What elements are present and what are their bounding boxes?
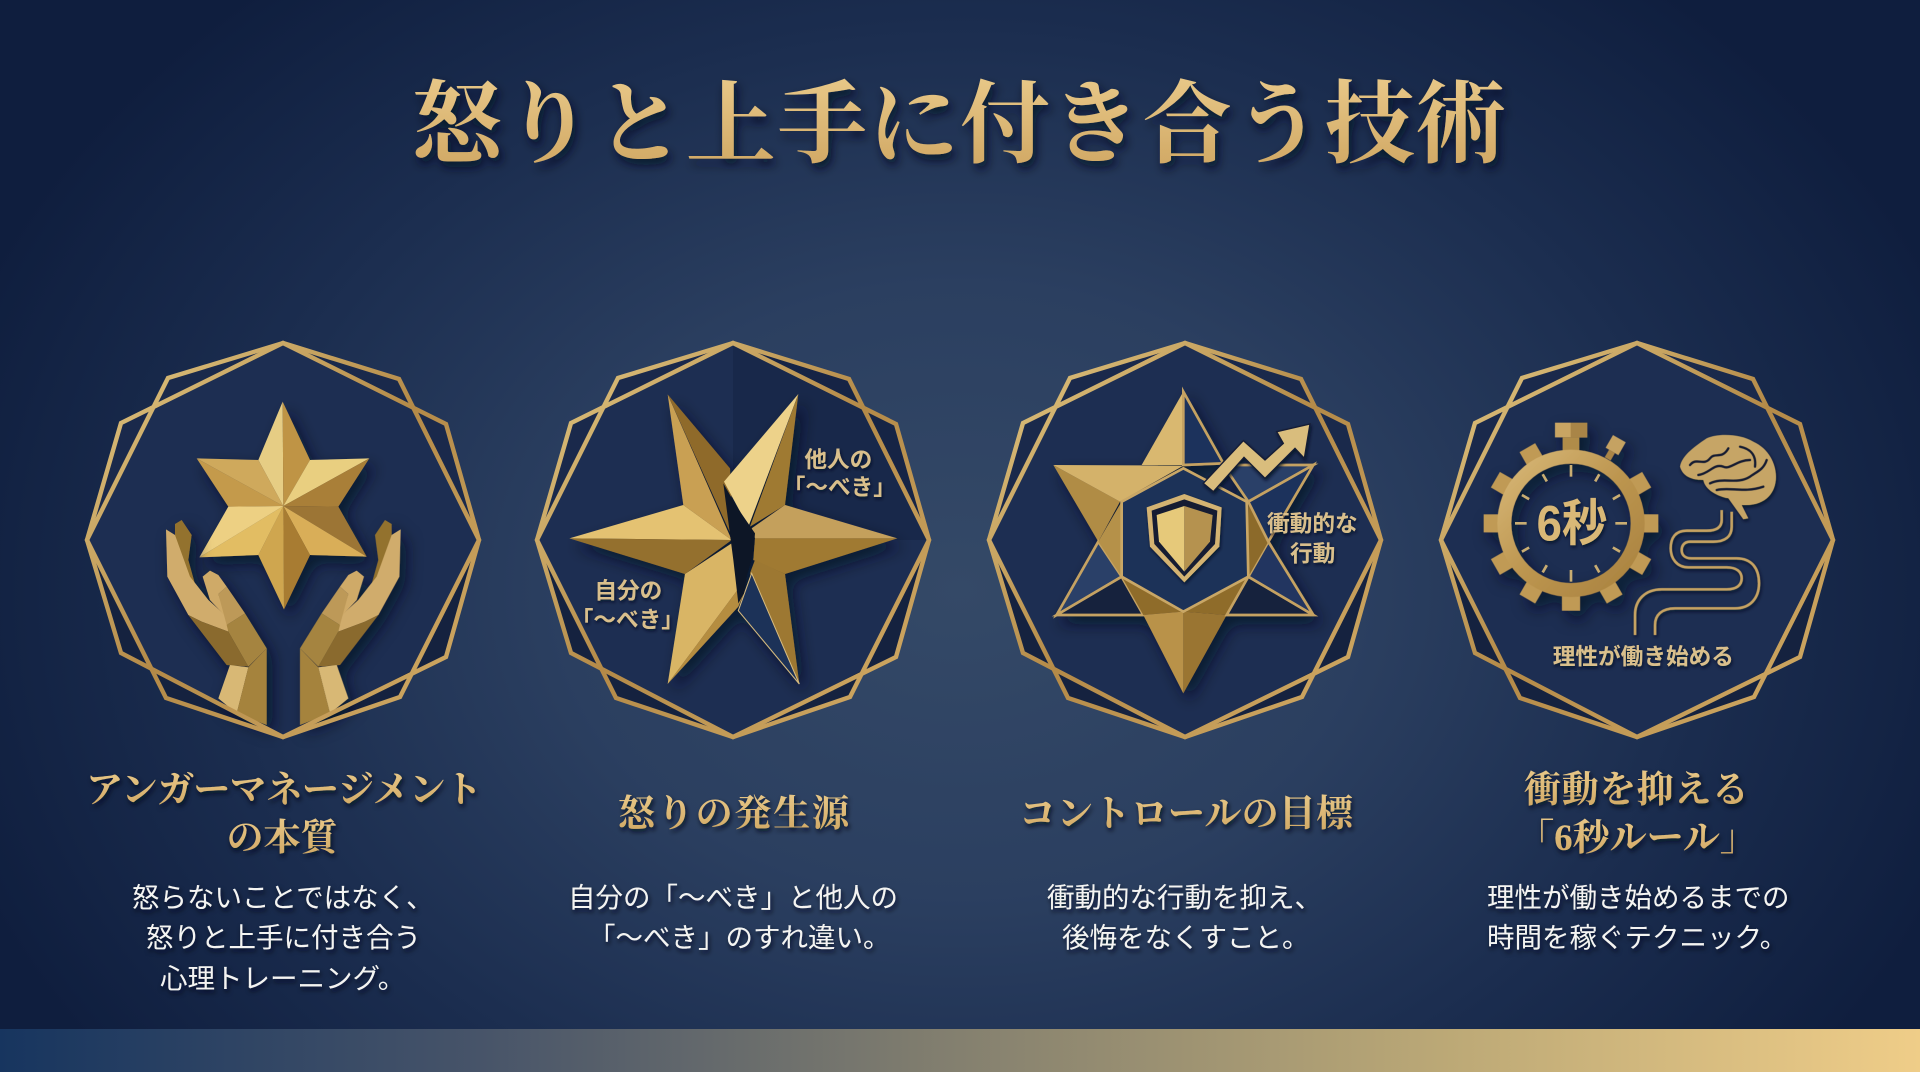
- heading: 怒りの発生源: [618, 793, 852, 835]
- bottom gradient bar: [0, 1029, 1920, 1072]
- star facets: [569, 394, 897, 684]
- icon: shield: [1147, 494, 1222, 582]
- star facets: [1053, 392, 1313, 693]
- icon: cupped hands: [166, 520, 401, 725]
- icon: gold star held by hands: [166, 402, 401, 725]
- description: 怒りと上手に付き合う: [146, 922, 421, 953]
- description: [1487, 882, 1790, 953]
- description: [132, 882, 434, 994]
- label: reason begins to work: 理性が働き始める: [1553, 644, 1734, 670]
- octagon frame: [989, 343, 1381, 737]
- description: 「〜べき」のすれ違い。: [588, 922, 890, 953]
- description: 自分の「〜べき」と他人の: [568, 882, 898, 913]
- description: [1047, 882, 1322, 953]
- octagon frame: [87, 343, 479, 737]
- description: [568, 882, 898, 953]
- panel: essence of anger management: [86, 343, 482, 994]
- icon: stopwatch gear: [1484, 423, 1658, 611]
- icon: stopwatch gear, brain and path: [1484, 423, 1776, 670]
- panel: six second rule: [1441, 343, 1833, 953]
- description: 後悔をなくすこと。: [1062, 922, 1310, 953]
- icon: star with shield and arrow: [1053, 392, 1358, 693]
- heading: コントロールの目標: [1019, 793, 1355, 835]
- icon: cracked star: [569, 394, 897, 684]
- description: 時間を稼ぐテクニック。: [1487, 922, 1787, 953]
- label: others' shoulds: 「〜べき」: [783, 474, 896, 500]
- label: impulsive action: 行動: [1290, 540, 1335, 566]
- panel: control goal: [989, 343, 1381, 953]
- label: impulsive action: 衝動的な: [1267, 510, 1358, 536]
- description: 衝動的な行動を抑え、: [1047, 882, 1322, 913]
- label: others' shoulds: 他人の: [804, 447, 872, 473]
- fold shading: [733, 343, 929, 540]
- label: own shoulds: 自分の: [594, 577, 662, 603]
- heading: [1517, 769, 1757, 859]
- icon: brain: [1680, 435, 1776, 519]
- panel: source of anger: [537, 343, 929, 953]
- description: 怒らないことではなく、: [132, 882, 434, 913]
- clock ticks: [1515, 465, 1627, 582]
- label: others' shoulds: [783, 447, 896, 500]
- icon: winding path: [1635, 510, 1759, 635]
- description: 理性が働き始めるまでの: [1487, 882, 1790, 913]
- label: six seconds: 6秒: [1537, 496, 1607, 552]
- title: 怒りと上手に付き合う技術: [412, 76, 1506, 175]
- icon: six-pointed star: [197, 402, 369, 609]
- octagon frame: [537, 343, 929, 737]
- octagon frame: [1441, 343, 1833, 737]
- heading: [86, 770, 482, 859]
- label: impulsive action: [1267, 510, 1358, 566]
- heading: 衝動を抑える: [1524, 769, 1749, 811]
- icon: rising arrow: [1203, 424, 1310, 492]
- heading: 「6秒ルール」: [1517, 817, 1757, 859]
- label: own shoulds: [571, 577, 684, 632]
- heading: の本質: [226, 817, 341, 859]
- heading: アンガーマネージメント: [86, 770, 482, 811]
- description: 心理トレーニング。: [160, 963, 405, 994]
- label: own shoulds: 「〜べき」: [571, 606, 684, 632]
